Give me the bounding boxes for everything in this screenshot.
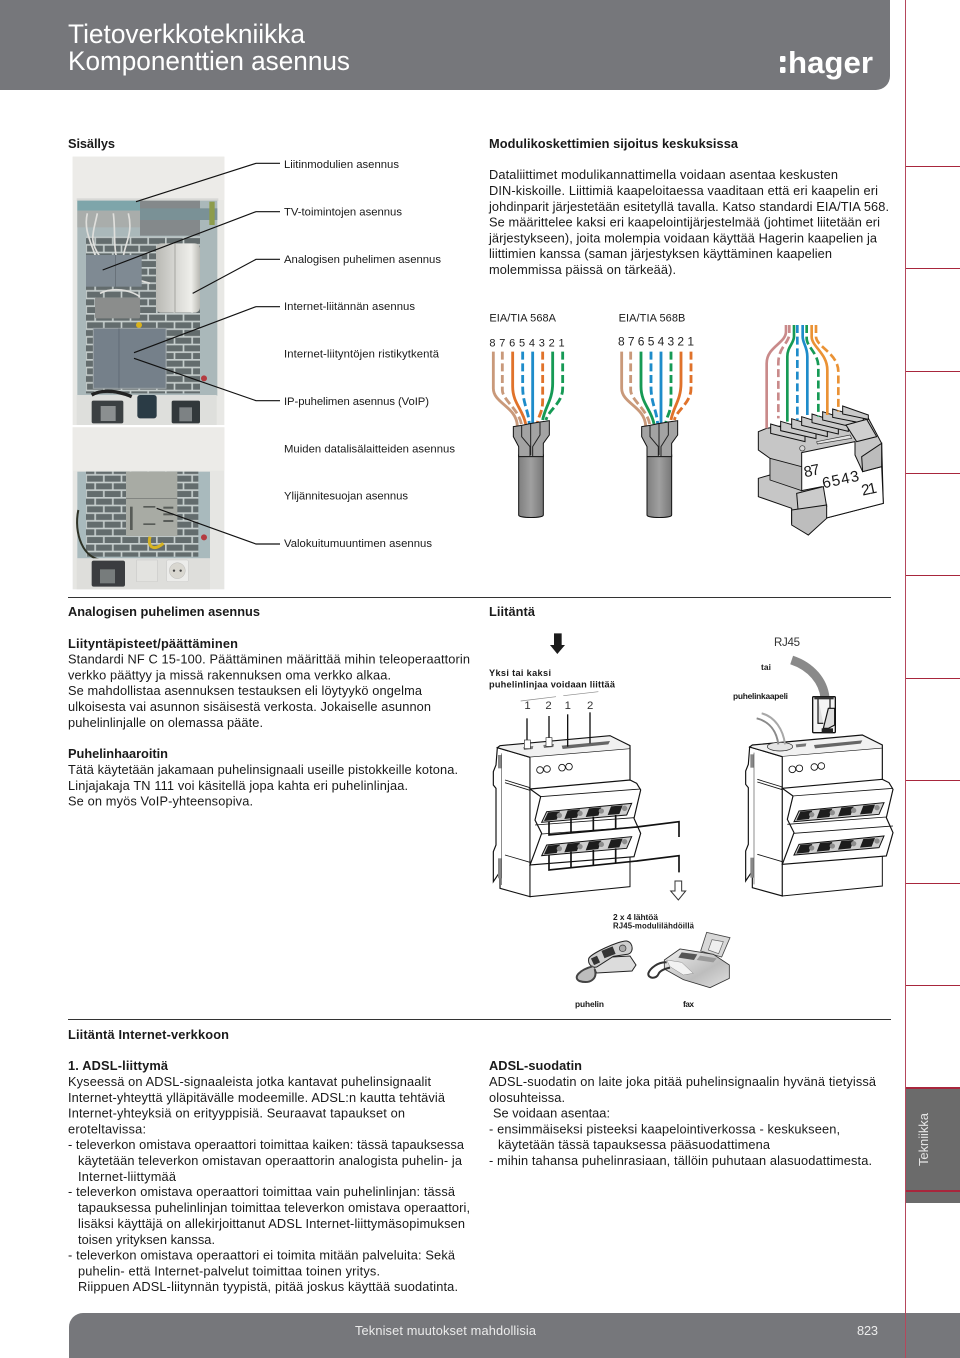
connector pin numbers (802, 461, 878, 500)
contents list: Internet-liitännän asennus (284, 301, 415, 313)
text block: module placement (488, 136, 889, 277)
photo: upper cabinet (73, 157, 224, 425)
diagram captions: RJ45 (774, 637, 800, 649)
text block: internet connection: käytetään televerkon omistavan operaattorin analogista puhelin- ja (78, 1153, 463, 1168)
logo: hager: hager (788, 46, 873, 80)
line numbers: 1 (524, 700, 531, 712)
diagram: EIA/TIA 568B (618, 313, 694, 517)
line numbers: 1 (565, 700, 571, 712)
text block: module placement: Modulikoskettimien sijoitus keskuksissa (489, 136, 739, 151)
diagram captions: RJ45-modulilähdöillä (613, 922, 695, 930)
text block: analog phone installation: Analogisen puhelimen asennus (68, 604, 260, 619)
side tab label: Tekniikka (916, 1112, 931, 1166)
text block: module placement: johdinparit järjestetään esitetyllä tavalla. Katso standardi EIA/TIA 568. (488, 199, 889, 214)
contents list: Ylijännitesuojan asennus (284, 490, 408, 502)
text block: module placement: järjestykseen), joita molempia voidaan käyttää Hagerin kaapelien ja (488, 230, 878, 246)
text block: analog phone installation: puhelinlinjalle on olemassa pääte. (68, 715, 263, 730)
text block: internet connection: 1. ADSL-liittymä (68, 1058, 169, 1073)
text block: ADSL filter: olosuhteissa. (489, 1090, 565, 1105)
text block: internet connection: Internet-liittymää (78, 1169, 177, 1184)
icon: fax (648, 932, 730, 988)
text block: analog phone installation (68, 604, 470, 808)
contents list: Muiden datalisälaitteiden asennus (284, 444, 455, 456)
diagram captions: Yksi tai kaksi (489, 668, 551, 678)
side tab strip (906, 166, 960, 1203)
contents list: TV-toimintojen asennus (284, 206, 402, 218)
diagram captions: 2 x 4 lähtöä (613, 912, 658, 922)
text block: analog phone installation: Tätä käytetään jakamaan puhelinsignaali useille pistokkeille kotona. (68, 762, 458, 777)
diagram: RJ45 connector wiring (758, 325, 883, 535)
text block: analog phone installation: Linjajakaja TN 111 voi käsitellä jopa kahta eri puhelinlinjaa. (68, 778, 408, 793)
text block: analog phone installation: Se on myös VoIP-yhteensopiva. (68, 794, 253, 808)
diagram captions: tai (761, 662, 771, 672)
heading: Liitäntä: Liitäntä (489, 604, 536, 619)
text block: internet connection: Internet-yhteyksiä on erityyppisiä. Seuraavat tapaukset on (68, 1106, 405, 1120)
heading: Sisällys: Sisällys (68, 136, 115, 151)
diagram: EIA/TIA 568B: 8 7 6 5 4 3 2 1 (618, 335, 694, 349)
header band (0, 0, 890, 90)
footer band: Tekniset muutokset mahdollisia (355, 1323, 537, 1338)
connector pin numbers: 6543 (821, 468, 861, 492)
vertical margin line (905, 0, 906, 1358)
text block: analog phone installation: ulkoisesta vai asunnon sisäisestä verkosta. Jokaiselle asunnon (68, 699, 431, 714)
text block: ADSL filter: Se voidaan asentaa: (493, 1106, 610, 1120)
diagram captions (489, 637, 800, 1009)
connection diagram (493, 633, 893, 988)
connector pin numbers: 21 (860, 480, 878, 500)
line numbers: 2 (545, 700, 552, 712)
diagram: EIA/TIA 568A: 8 7 6 5 4 3 2 1 (489, 338, 565, 350)
text block: analog phone installation: Liityntäpisteet/päättäminen (68, 636, 238, 651)
text block: analog phone installation: Puhelinhaaroitin (68, 746, 168, 761)
line numbers (521, 692, 598, 712)
text block: module placement: DIN-kiskoille. Liittimiä kaapeloitaessa vaaditaan että eri kaapelin eri (489, 183, 878, 198)
diagram: EIA/TIA 568A: EIA/TIA 568A (489, 313, 557, 325)
text block: analog phone installation: Standardi NF C 15-100. Päättäminen määrittää mihin teleoperaattorin (68, 652, 470, 666)
text block: ADSL filter: ADSL-suodatin on laite joka pitää puhelinsignaalin hyvänä tietyissä (489, 1074, 877, 1089)
text block: module placement: Se määrittelee kaksi eri kaapelointijärjestelmää (johtimet liitetään eri (489, 214, 880, 230)
text block: internet connection: Kyseessä on ADSL-signaaleista jotka kantavat puhelinsignaalit (68, 1074, 431, 1089)
leader lines (103, 163, 280, 544)
contents list (284, 159, 455, 550)
arrow: input (550, 633, 565, 654)
text block: module placement: Dataliittimet modulikannattimella voidaan asentaa keskusten (489, 167, 838, 182)
text block: internet connection: Riippuen ADSL-liitynnän tyypistä, pitää joskus käyttää suodatinta. (78, 1279, 458, 1294)
diagram captions: fax (683, 999, 694, 1009)
text block: module placement: liittimien kanssa (saman järjestyksen käyttäminen kaapelien (489, 246, 832, 261)
title (68, 19, 350, 76)
wiring diagrams (489, 313, 883, 535)
text block: module placement: molemmissa päissä on tärkeää). (489, 262, 676, 277)
text block: internet connection: puhelin- että Internet-palvelut toimittaa toinen yritys. (78, 1264, 380, 1278)
title: Komponenttien asennus (68, 46, 350, 76)
module: right with RJ45 and phone cable (746, 660, 893, 896)
contents list: Liitinmodulien asennus (284, 159, 399, 171)
module: left with wired outputs (493, 712, 679, 897)
text block: internet connection (68, 1027, 470, 1294)
text block: internet connection: - televerkon omistava operaattori toimittaa vain puhelinlinjan: tässä (68, 1184, 456, 1199)
text block: internet connection: Internet-yhteyttä ylläpitävälle modeemille. ADSL:n kautta tehtäviä (68, 1090, 446, 1105)
text block: analog phone installation: verkko päättyy ja missä rakennuksen oma verkko alkaa. (68, 668, 391, 682)
line numbers: 2 (587, 700, 593, 712)
icon: telephone (577, 941, 636, 982)
text block: internet connection: eroteltavissa: (68, 1122, 146, 1136)
connector pin numbers: 87 (802, 461, 821, 481)
text block: internet connection: - televerkon omistava operaattori ei toimita mitään palveluita: Sekä (68, 1248, 456, 1262)
text block: ADSL filter: - ensimmäiseksi pisteeksi kaapelointiverkossa - keskukseen, (489, 1122, 840, 1136)
photo: lower cabinet (73, 427, 224, 589)
contents list: Valokuitumuuntimen asennus (284, 538, 432, 550)
arrow: output (671, 881, 686, 900)
text block: internet connection: tapauksessa puhelinlinjan toimittaa televerkon omistava operaattori, (78, 1200, 470, 1215)
text block: internet connection: Liitäntä Internet-verkkoon (68, 1027, 229, 1042)
footer band (69, 1313, 960, 1358)
text block: internet connection: lisäksi käyttäjä on allekirjoittanut ADSL Internet-liittymäsopimuksen (78, 1216, 465, 1231)
contents list: IP-puhelimen asennus (VoIP) (284, 396, 429, 408)
contents list: Internet-liityntöjen ristikytkentä (284, 348, 440, 360)
section rules (68, 597, 891, 1020)
diagram captions: puhelinlinjaa voidaan liittää (489, 680, 616, 690)
diagram: EIA/TIA 568B: EIA/TIA 568B (619, 313, 685, 325)
title: Tietoverkkotekniikka (68, 19, 305, 49)
diagram captions: puhelin (575, 999, 604, 1009)
text block: ADSL filter: käytetään tässä tapauksessa pääsuodattimena (498, 1137, 771, 1152)
text block: ADSL filter: ADSL-suodatin (489, 1058, 582, 1073)
text block: ADSL filter (489, 1058, 877, 1168)
footer band: 823 (857, 1323, 878, 1338)
text block: analog phone installation: Se mahdollistaa asennuksen testauksen eli löytyykö ongelma (68, 683, 423, 698)
contents list: Analogisen puhelimen asennus (284, 254, 441, 266)
text block: internet connection: toisen yrityksen kanssa. (78, 1232, 215, 1247)
diagram captions: puhelinkaapeli (733, 691, 788, 701)
diagram: EIA/TIA 568A (489, 313, 565, 517)
text block: internet connection: - televerkon omistava operaattori toimittaa kaiken: tässä tapauksessa (68, 1137, 465, 1152)
text block: ADSL filter: - mihin tahansa puhelinrasiaan, tällöin puhutaan alasuodattimesta. (489, 1153, 872, 1168)
